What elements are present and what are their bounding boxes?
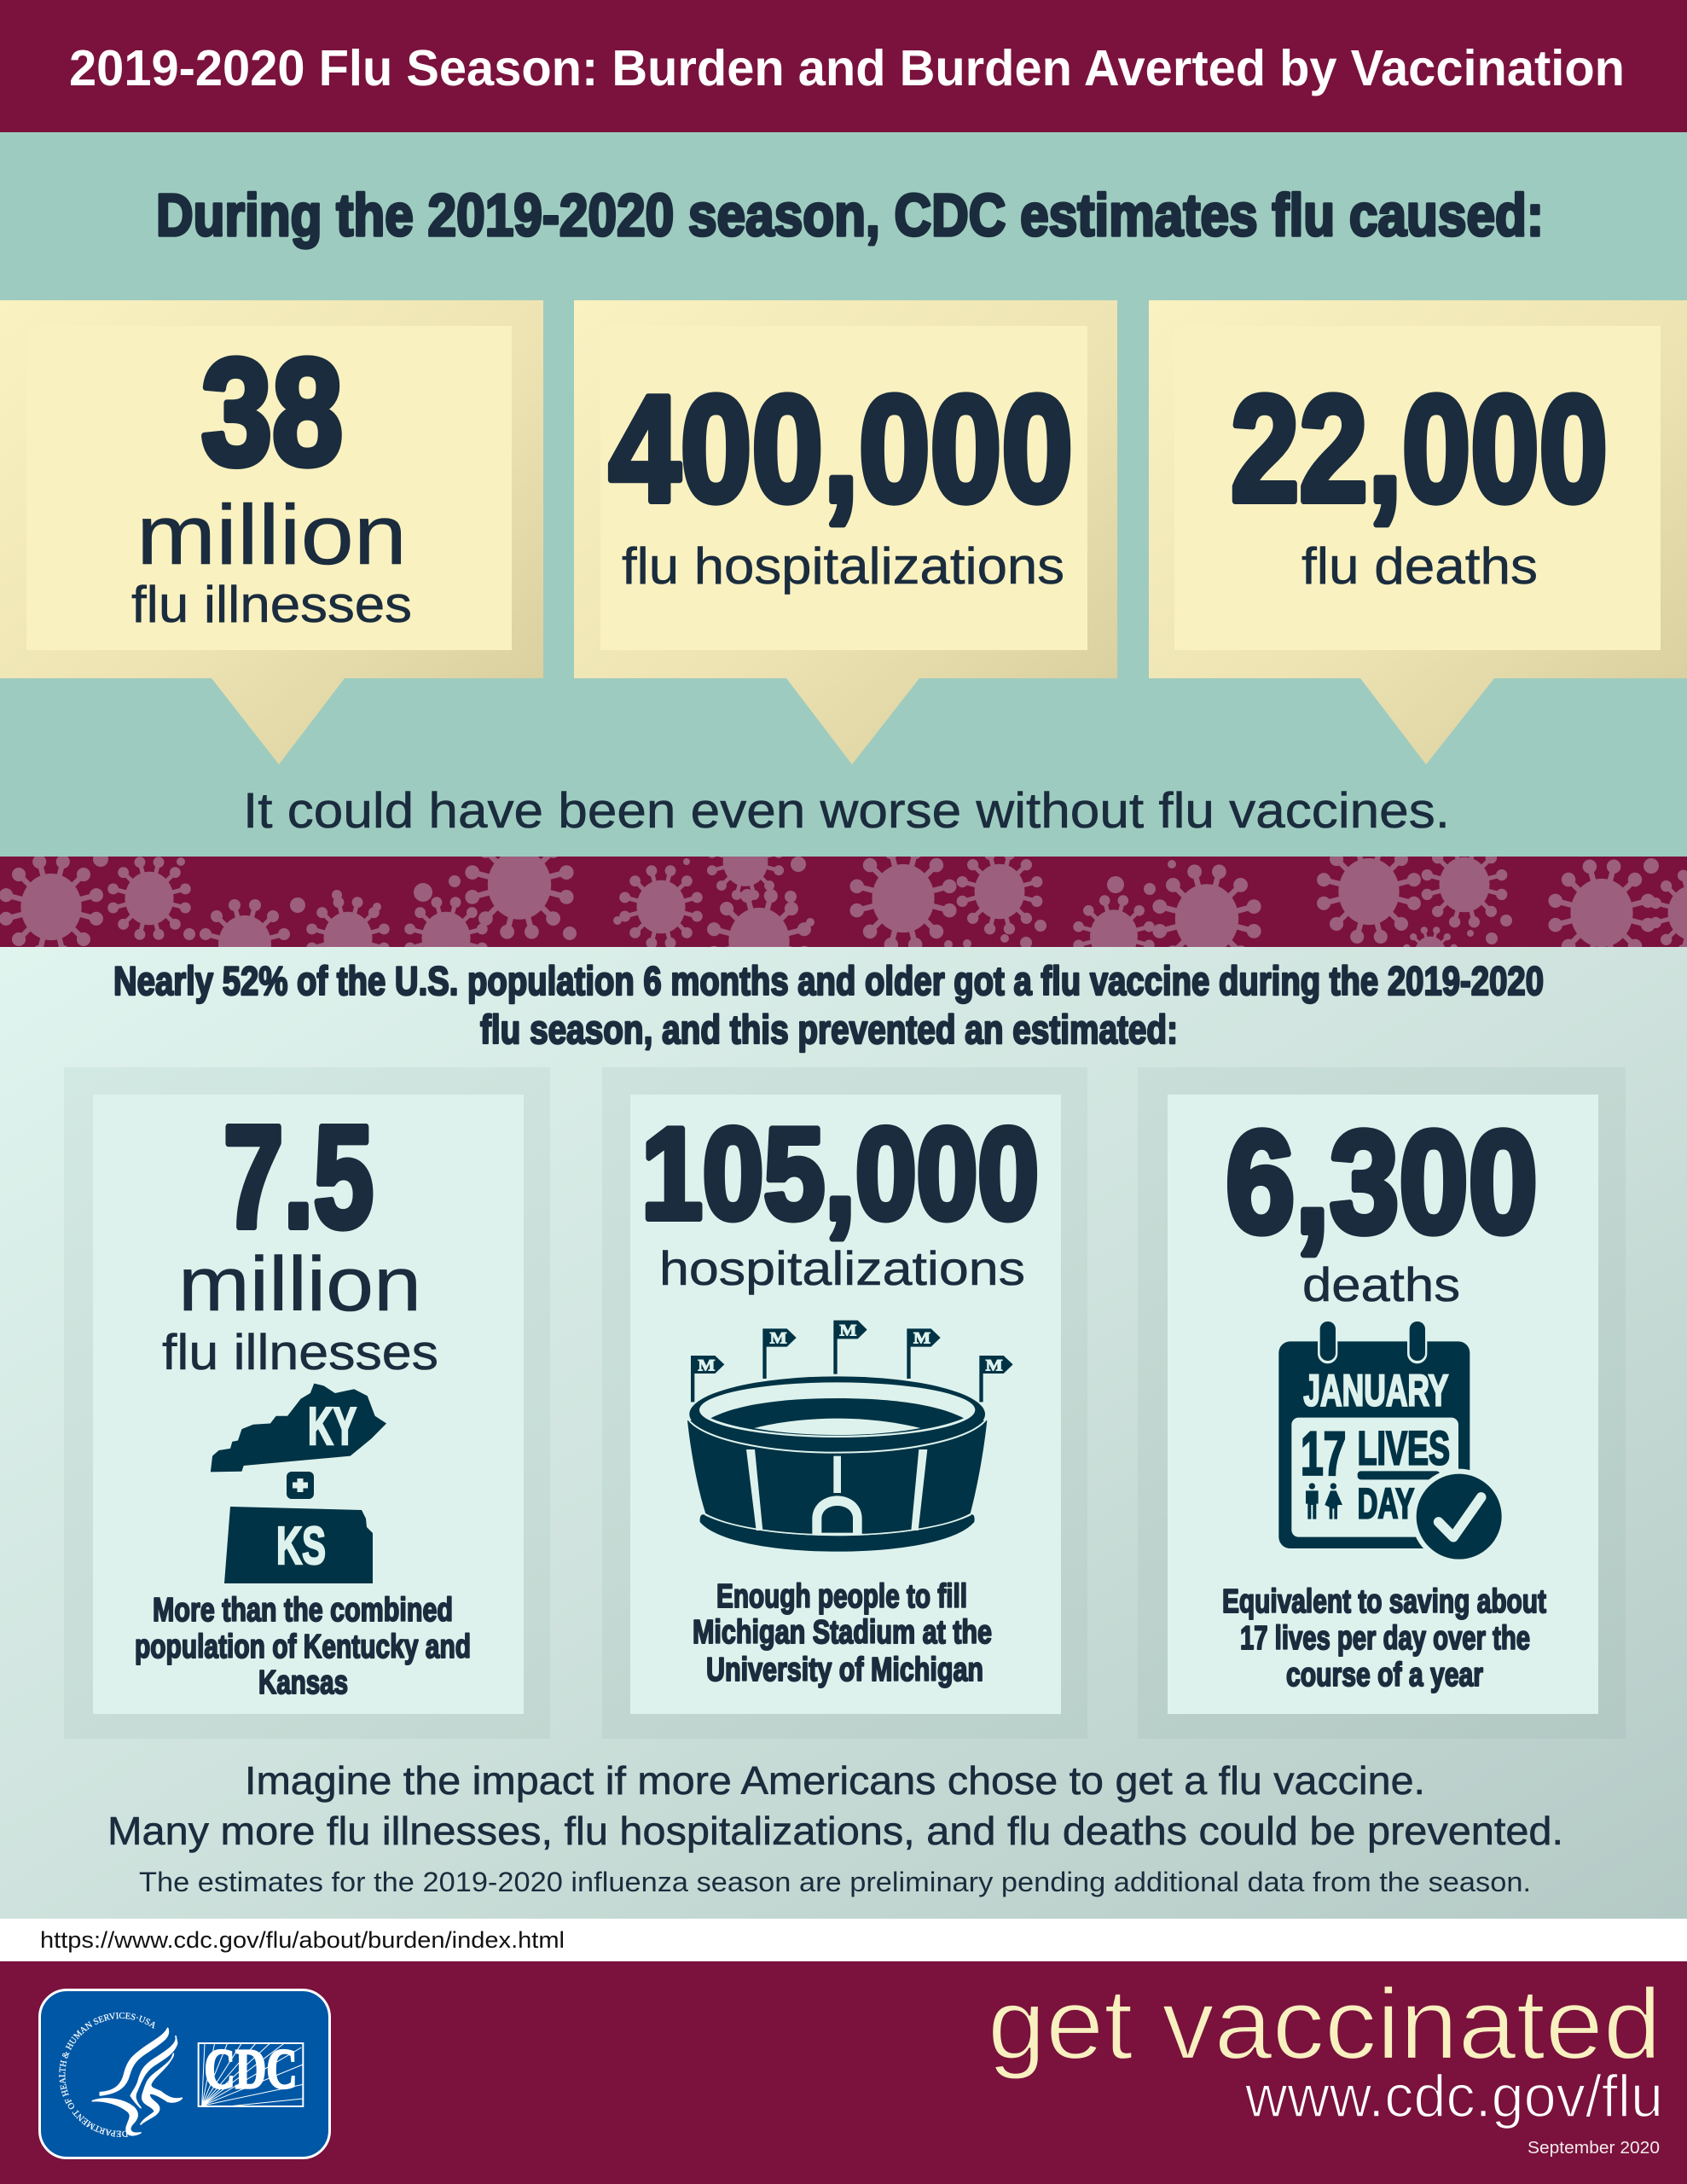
panel: 105,000 hospitalizations prevented: Michigan Stadium at the (693, 1614, 992, 1651)
panel: 7.5 million illnesses prevented: More than the combined (153, 1592, 453, 1629)
panel: 7.5 million illnesses prevented: population of Kentucky and (135, 1629, 471, 1665)
icon: calendar with check mark: 17 (1301, 1420, 1346, 1488)
panel: 6,300 deaths prevented: deaths (1302, 1258, 1460, 1311)
text: imagine the impact: Imagine the impact if more Americans chose to get a flu vaccine. (245, 1758, 1425, 1803)
icon: stadium with flags: M (698, 1356, 716, 1374)
panel: 7.5 million illnesses prevented: million (178, 1242, 421, 1327)
callout: 22,000 flu deaths: flu deaths (1301, 537, 1538, 595)
callout: 38 million flu illnesses: million (136, 487, 407, 582)
icon: calendar with check mark (1278, 1321, 1507, 1565)
date: September 2020 (1528, 2139, 1660, 2158)
panel: 6,300 deaths prevented: Equivalent to saving about (1222, 1583, 1546, 1620)
virus pattern band (0, 857, 1687, 947)
source link strip (0, 1919, 1687, 1961)
icon: calendar with check mark: DAY (1358, 1479, 1414, 1527)
heading: vaccination prevented: flu season, and this prevented an estimated: (480, 1007, 1178, 1052)
panel: 6,300 deaths prevented: 17 lives per day over the (1240, 1620, 1530, 1657)
source link strip: https://www.cdc.gov/flu/about/burden/index.html (40, 1927, 565, 1953)
text: could have been worse: It could have been even worse without flu vaccines. (243, 783, 1450, 839)
callout: 400,000 flu hospitalizations: 400,000 (609, 364, 1073, 533)
panel: 105,000 hospitalizations prevented (602, 1067, 1087, 1739)
panel: 7.5 million illnesses prevented: flu illnesses (162, 1325, 438, 1380)
website: www.cdc.gov/flu (1244, 2063, 1663, 2129)
panel: 6,300 deaths prevented: course of a year (1286, 1657, 1483, 1693)
panel: 105,000 hospitalizations prevented: hospitalizations (659, 1241, 1025, 1295)
panel: 7.5 million illnesses prevented: 7.5 (223, 1096, 374, 1258)
callout: 38 million flu illnesses (0, 300, 543, 764)
panel: 6,300 deaths prevented: 6,300 (1226, 1101, 1538, 1263)
callout: 38 million flu illnesses: flu illnesses (131, 576, 412, 633)
icon: stadium with flags: M (839, 1321, 857, 1339)
page background: teal section (0, 132, 1687, 857)
text: imagine the impact (107, 1758, 1563, 1897)
text: imagine the impact: The estimates for the 2019-2020 influenza season are preliminary pending additional data from the season. (139, 1867, 1531, 1897)
callout: 400,000 flu hospitalizations (574, 300, 1117, 764)
panel: 105,000 hospitalizations prevented: University of Michigan (706, 1652, 983, 1688)
heading: vaccination prevented (113, 958, 1544, 1052)
header banner (0, 0, 1687, 132)
icon: Kentucky plus Kansas: KS (276, 1517, 326, 1576)
title: 2019-2020 Flu Season: Burden and Burden Averted by Vaccination (69, 40, 1625, 96)
callout: 22,000 flu deaths: 22,000 (1231, 364, 1608, 533)
panel: 7.5 million illnesses prevented (64, 1067, 550, 1739)
text: imagine the impact: Many more flu illnesses, flu hospitalizations, and flu deaths could be prevented. (107, 1809, 1563, 1853)
callout: 22,000 flu deaths (1149, 300, 1687, 764)
callout: 400,000 flu hospitalizations: flu hospitalizations (622, 537, 1064, 595)
icon: stadium with flags: M (913, 1330, 930, 1348)
panel: 105,000 hospitalizations prevented: 105,000 (641, 1101, 1039, 1246)
panel: 6,300 deaths prevented (1138, 1067, 1626, 1739)
lower section background (0, 947, 1687, 1919)
icon: calendar with check mark: LIVES (1358, 1422, 1450, 1475)
icon: Kentucky plus Kansas: KY (308, 1397, 357, 1456)
logo: HHS and CDC: DEPARTMENT OF HEALTH & HUMAN SERVICES·USA (59, 2012, 155, 2137)
icon: stadium with flags (687, 1321, 1013, 1552)
icon: stadium with flags: M (770, 1330, 787, 1348)
panel: 7.5 million illnesses prevented: Kansas (258, 1664, 348, 1701)
callout: 38 million flu illnesses: 38 (201, 328, 343, 497)
call to action: get vaccinated: get vaccinated (988, 1968, 1661, 2081)
icon: Kentucky plus Kansas (211, 1384, 386, 1583)
icon: calendar with check mark: JANUARY (1303, 1366, 1448, 1415)
logo: HHS and CDC: CDC (204, 2038, 298, 2100)
footer banner (38, 1968, 1663, 2159)
icon: stadium with flags: M (986, 1356, 1003, 1374)
logo: HHS and CDC (38, 1989, 331, 2159)
panel: 105,000 hospitalizations prevented: Enough people to fill (716, 1578, 967, 1615)
